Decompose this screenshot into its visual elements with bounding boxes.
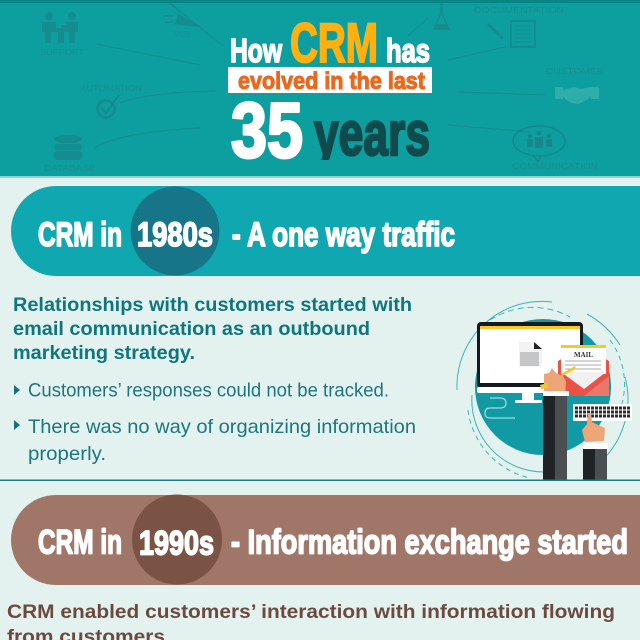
title line: How CRM has: How xyxy=(230,32,282,69)
right sleeve xyxy=(583,443,608,480)
title xyxy=(228,22,432,160)
label: documentation: DOCUMENTATION xyxy=(474,6,564,15)
icon: documents and pencil xyxy=(488,21,535,47)
decorative rings xyxy=(457,301,628,478)
bullet list: 1980s: There was no way of organizing information xyxy=(28,416,416,438)
label: communication: COMMUNICATION xyxy=(512,162,598,171)
envelope with mail: MAIL xyxy=(574,351,593,359)
label: sales: SALES xyxy=(174,30,190,39)
header banner xyxy=(0,0,640,178)
heading bar: CRM in 1980s: - A one way traffic xyxy=(232,216,455,254)
text block: 1990s summary xyxy=(7,601,615,640)
label: automation: AUTOMATION xyxy=(80,84,142,93)
keyboard xyxy=(573,404,632,421)
heading bar: CRM in 1980s xyxy=(11,186,640,276)
illustration: email on monitor xyxy=(457,301,632,480)
icon: database xyxy=(54,135,82,160)
bullet list: 1980s xyxy=(14,380,416,465)
title line: How CRM has: has xyxy=(386,32,430,69)
heading bar: CRM in 1980s: 1980s xyxy=(137,216,213,254)
text block: 1980s summary: marketing strategy. xyxy=(13,343,195,364)
connector lines xyxy=(95,2,545,148)
title line: How CRM has xyxy=(230,11,430,74)
hand on keyboard xyxy=(582,413,605,442)
icon: partnership xyxy=(42,12,78,43)
label: database: DATABASE xyxy=(44,164,96,173)
text block: 1990s summary: CRM enabled customers’ interaction with information flowing xyxy=(7,601,615,623)
bullet list: 1980s: Customers’ responses could not be tracked. xyxy=(28,380,389,402)
heading bar: CRM in 1990s: CRM in xyxy=(38,524,122,562)
icon: handshake xyxy=(555,87,599,104)
text block: 1980s summary: email communication as an outbound xyxy=(13,319,370,340)
title line: How CRM has: CRM xyxy=(290,11,378,74)
section divider xyxy=(0,480,640,481)
heading bar: CRM in 1990s: 1990s xyxy=(139,524,214,562)
title number: 35 years: years xyxy=(314,100,430,169)
title number: 35 years: 35 xyxy=(231,86,303,174)
envelope with mail xyxy=(558,345,609,396)
label: support: SUPPORT xyxy=(40,48,84,57)
heading bar: CRM in 1990s xyxy=(11,494,640,585)
icon: communication bubble xyxy=(513,126,565,162)
hand with pencil xyxy=(540,366,576,396)
monitor xyxy=(477,322,583,403)
heading bar: CRM in 1980s: CRM in xyxy=(38,216,122,254)
text block: 1980s summary: Relationships with customers started with xyxy=(13,295,412,316)
title number: 35 years xyxy=(231,101,430,160)
icon: check mark xyxy=(98,95,119,118)
icon: flask xyxy=(434,3,449,29)
text block: 1980s summary xyxy=(13,295,412,364)
bullet list: 1980s: properly. xyxy=(28,443,106,465)
left sleeve xyxy=(543,391,569,480)
title ribbon: evolved in the last: evolved in the last xyxy=(238,68,425,95)
icon: megaphone xyxy=(163,0,202,27)
label: customer care: CUSTOMER xyxy=(546,67,604,76)
